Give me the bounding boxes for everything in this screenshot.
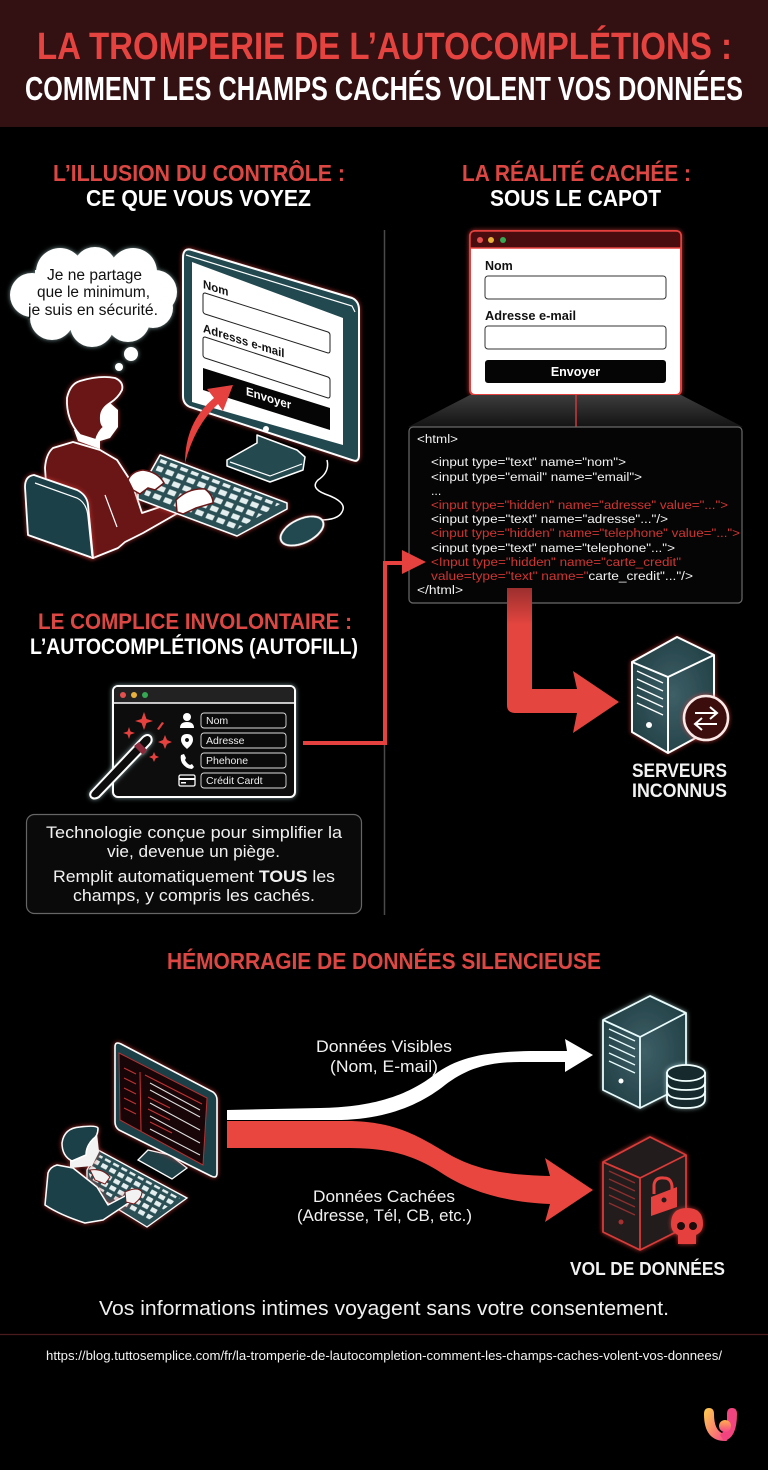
window bar [113, 687, 295, 703]
label: vol de données: VOL DE DONNÉES [570, 1258, 725, 1279]
big red arrow to unknown servers [507, 588, 619, 733]
callout: autofill explanation: vie, devenue un piège. [107, 842, 280, 861]
code lines: <input type="hidden" name="adresse" value="..."> [431, 498, 728, 512]
code lines: <input type="text" name="nom"> [431, 455, 626, 469]
source code panel [409, 427, 742, 603]
cloud text: je suis en sécurité. [27, 302, 158, 319]
heading: le complice involontaire: L’AUTOCOMPLÉTIONS (AUTOFILL) [30, 634, 358, 659]
server: stolen data [603, 1137, 703, 1250]
icon: skull [671, 1208, 703, 1244]
label: hidden data: Données Cachées [313, 1187, 455, 1206]
heading: la réalité cachée: LA RÉALITÉ CACHÉE : [462, 159, 691, 186]
heading: l'illusion du contrôle: CE QUE VOUS VOYEZ [86, 185, 311, 211]
person [45, 1126, 130, 1223]
code lines: </html> [417, 583, 463, 597]
code lines: ... [431, 484, 441, 498]
browser form window [470, 231, 681, 395]
source url: https://blog.tuttosemplice.com/fr/la-tromperie-de-lautocompletion-comment-les-champs-caches-volent-vos-donnees/ [46, 1348, 722, 1363]
icon: exchange [684, 696, 728, 740]
icon: card [179, 775, 195, 786]
autofill window: Phehone [206, 755, 248, 767]
heading: la réalité cachée: SOUS LE CAPOT [490, 185, 661, 211]
monitor stand [138, 1150, 187, 1179]
label: hidden data [297, 1187, 472, 1225]
code lines: value=type="text" name=" carte_credit"..."/> [431, 569, 693, 583]
heading: le complice involontaire [30, 609, 358, 659]
conclusion text: Vos informations intimes voyagent sans votre consentement. [99, 1298, 669, 1320]
illustration: user leaking data [45, 1043, 217, 1227]
field labels [201, 713, 286, 788]
person [45, 377, 178, 558]
code lines: <input type="email" name="email"> [431, 470, 642, 484]
callout: autofill explanation: Technologie conçue pour simplifier la [46, 823, 343, 842]
logo [704, 1408, 737, 1441]
thin red connector arrow [303, 550, 426, 743]
red flow arrow: hidden data [227, 1121, 593, 1222]
form fields: Nom [485, 259, 513, 273]
icon: phone [181, 754, 194, 769]
autofill window [90, 686, 295, 798]
label: visible data: Données Visibles [316, 1037, 452, 1056]
label: serveurs inconnus: INCONNUS [632, 781, 727, 802]
icon: padlock [651, 1178, 677, 1216]
keyboard [87, 1150, 187, 1227]
icon: pin [181, 734, 193, 749]
label: hidden data: (Adresse, Tél, CB, etc.) [297, 1206, 472, 1225]
form fields in perspective [203, 277, 330, 430]
cloud text [27, 267, 158, 319]
hands [90, 1170, 142, 1204]
cloud text: Je ne partage [47, 267, 142, 284]
label: visible data: (Nom, E-mail) [330, 1057, 438, 1076]
illustration: user at computer [10, 247, 359, 558]
code lines: <input type="text" name="telephone"..."> [431, 541, 675, 555]
sparkles [123, 712, 172, 762]
heading: l'illusion du contrôle: L’ILLUSION DU CONTRÔLE : [53, 159, 345, 186]
code lines: <input type="text" name="adresse"..."/> [431, 512, 668, 526]
cable and mouse [276, 460, 343, 552]
title bar [470, 231, 681, 248]
server: unknown servers [632, 637, 728, 753]
form fields: Envoyer [551, 365, 600, 379]
icon: person [180, 713, 194, 728]
callout: autofill explanation: champs, y compris les cachés. [73, 886, 315, 905]
icon: database [667, 1065, 705, 1108]
funnel to source code [408, 395, 743, 427]
label: serveurs inconnus [632, 761, 727, 802]
label: serveurs inconnus: SERVEURS [632, 761, 727, 782]
label: visible data [316, 1037, 452, 1076]
code lines: <input type="hidden" name="telephone" value="..."> [431, 526, 740, 540]
hands [128, 470, 213, 514]
heading: hémorragie de données: HÉMORRAGIE DE DONNÉES SILENCIEUSE [167, 947, 601, 974]
thought cloud [10, 247, 177, 371]
heading: la réalité cachée [462, 159, 691, 211]
code lines [417, 432, 740, 597]
monitor stand [227, 435, 305, 482]
autofill window: Adresse [206, 735, 245, 747]
form fields in perspective: Envoyer [246, 384, 292, 412]
monitor frame [183, 249, 359, 461]
form fields in perspective: Nom [203, 277, 228, 299]
callout: autofill explanation [26, 814, 362, 914]
code screen [119, 1053, 207, 1165]
form fields [485, 259, 666, 383]
form fields in perspective: Adresss e-mail [203, 321, 285, 361]
code lines: <html> [417, 432, 458, 446]
code lines: <Input type="hidden" name="carte_credit" [431, 555, 681, 569]
keyboard [138, 455, 287, 536]
red click arrow [185, 385, 233, 463]
server with database [603, 996, 705, 1108]
monitor [115, 1043, 217, 1177]
magic wand [90, 735, 152, 798]
white flow arrow: visible data [227, 1039, 593, 1120]
cloud text: que le minimum, [37, 284, 150, 301]
form fields: Adresse e-mail [485, 309, 576, 323]
callout: autofill explanation: Remplit automatiquement TOUS les [53, 867, 335, 886]
monitor screen [192, 262, 343, 445]
header banner [0, 0, 768, 127]
autofill window: Crédit Cardt [206, 775, 263, 787]
heading: le complice involontaire: LE COMPLICE INVOLONTAIRE : [38, 609, 352, 634]
heading: l'illusion du contrôle [53, 159, 345, 211]
chair [25, 475, 93, 558]
autofill window: Nom [206, 715, 228, 727]
